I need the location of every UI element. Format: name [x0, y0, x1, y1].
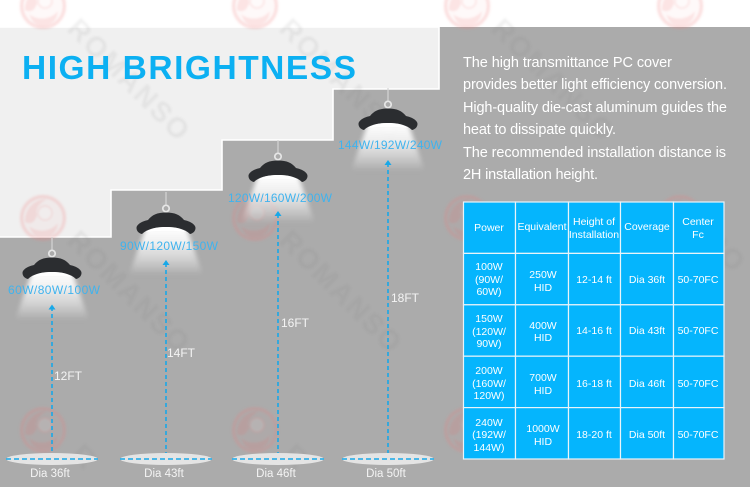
table row 100W: 50-70FC	[678, 274, 719, 286]
wattage label 3: 120W/160W/200W	[228, 191, 333, 205]
table row 240W: 240W	[475, 417, 503, 429]
coverage ellipse	[120, 453, 212, 465]
coverage ellipse	[232, 453, 324, 465]
arrow 12FT	[48, 304, 56, 459]
table row 150W: HID	[534, 332, 552, 344]
table row 200W: 16-18 ft	[576, 378, 612, 390]
wattage label 4: 144W/192W/240W	[338, 138, 443, 152]
table row 200W: HID	[534, 385, 552, 397]
description text: The high transmittance PC cover	[463, 55, 672, 71]
height label: 18FT	[391, 291, 420, 305]
table row 200W: Dia 46ft	[629, 378, 665, 390]
table row 240W: 1000W	[526, 423, 560, 435]
table row 100W: 12-14 ft	[576, 274, 612, 286]
table row 150W: 150W	[475, 313, 503, 325]
table header row: Fc	[692, 229, 704, 241]
table row 240W: (192W/	[472, 429, 506, 441]
arrow 18FT	[384, 160, 392, 459]
table row 150W: 90W)	[476, 338, 502, 350]
table row 200W: 700W	[529, 372, 557, 384]
coverage label: Dia 36ft	[30, 468, 71, 480]
table row 150W: 50-70FC	[678, 325, 719, 337]
table header row: Installation	[569, 229, 619, 241]
table row 240W: HID	[534, 436, 552, 448]
lamp column 12FT	[6, 237, 101, 480]
watermarks: ROMANSO	[62, 12, 197, 148]
icon: lamp 4	[351, 88, 425, 171]
coverage label: Dia 43ft	[144, 468, 185, 480]
height label: 14FT	[167, 346, 196, 360]
table header row: Equivalent	[517, 221, 567, 233]
icon: lamp 1	[15, 237, 89, 320]
description text: 2H installation height.	[463, 167, 598, 183]
wattage label 2: 90W/120W/150W	[120, 239, 219, 253]
table row 240W: 144W)	[474, 442, 504, 454]
table row 240W: 50-70FC	[678, 429, 719, 441]
table header row: Coverage	[624, 221, 670, 233]
title: HIGH BRIGHTNESS	[22, 50, 356, 87]
table row 150W	[472, 313, 719, 350]
watermarks: ROMANSO	[274, 12, 409, 148]
table row 150W: 400W	[529, 320, 557, 332]
table header row	[474, 216, 714, 241]
description text: High-quality die-cast aluminum guides the	[463, 100, 727, 116]
table row 200W: 200W	[475, 365, 503, 377]
table header row: Center	[682, 216, 714, 228]
table row 150W: 14-16 ft	[576, 325, 612, 337]
table row 100W: HID	[534, 282, 552, 294]
coverage label: Dia 50ft	[366, 468, 407, 480]
table row 200W: (160W/	[472, 378, 506, 390]
specification table	[464, 202, 724, 459]
table row 240W: Dia 50ft	[629, 429, 665, 441]
lamp column 16FT	[228, 140, 333, 480]
watermarks: ROMANSO	[274, 224, 409, 360]
table row 150W: Dia 43ft	[629, 325, 665, 337]
table row 200W: 120W)	[474, 390, 504, 402]
coverage label: Dia 46ft	[256, 468, 297, 480]
arrow 14FT	[162, 260, 170, 459]
table row 100W: (90W/	[475, 274, 503, 286]
table row 100W: 100W	[475, 261, 503, 273]
stepped light panel	[0, 27, 439, 237]
table row 100W	[475, 261, 719, 298]
icon: lamp 3	[241, 140, 315, 223]
lamp column 14FT	[120, 192, 219, 480]
table row 100W: 250W	[529, 269, 557, 281]
coverage ellipse	[342, 453, 434, 465]
coverage ellipse	[6, 453, 98, 465]
table row 200W: 50-70FC	[678, 378, 719, 390]
description text: heat to dissipate quickly.	[463, 122, 616, 138]
height label: 16FT	[281, 316, 310, 330]
table row 100W: Dia 36ft	[629, 274, 665, 286]
wattage label 1: 60W/80W/100W	[8, 283, 101, 297]
table row 240W	[472, 417, 719, 454]
table header row: Power	[474, 222, 504, 234]
description text: The recommended installation distance is	[463, 145, 726, 161]
lamp column 18FT	[338, 88, 443, 480]
description text: provides better light efficiency conversion.	[463, 77, 727, 93]
watermarks: ROMANSO	[486, 224, 621, 360]
description text	[463, 55, 727, 183]
watermarks: R	[66, 438, 103, 476]
table header row: Height of	[573, 216, 615, 228]
height label: 12FT	[54, 369, 83, 383]
icon: lamp 2	[129, 192, 203, 275]
watermarks: R	[278, 438, 315, 476]
table grid	[464, 202, 724, 459]
arrow 16FT	[274, 211, 282, 459]
watermarks: ROMANSO	[486, 12, 621, 148]
table row 150W: (120W/	[472, 326, 506, 338]
watermarks: ROMANSO	[62, 224, 197, 360]
table row 100W: 60W)	[476, 286, 502, 298]
table row 240W: 18-20 ft	[576, 429, 612, 441]
table row 200W	[472, 365, 719, 402]
